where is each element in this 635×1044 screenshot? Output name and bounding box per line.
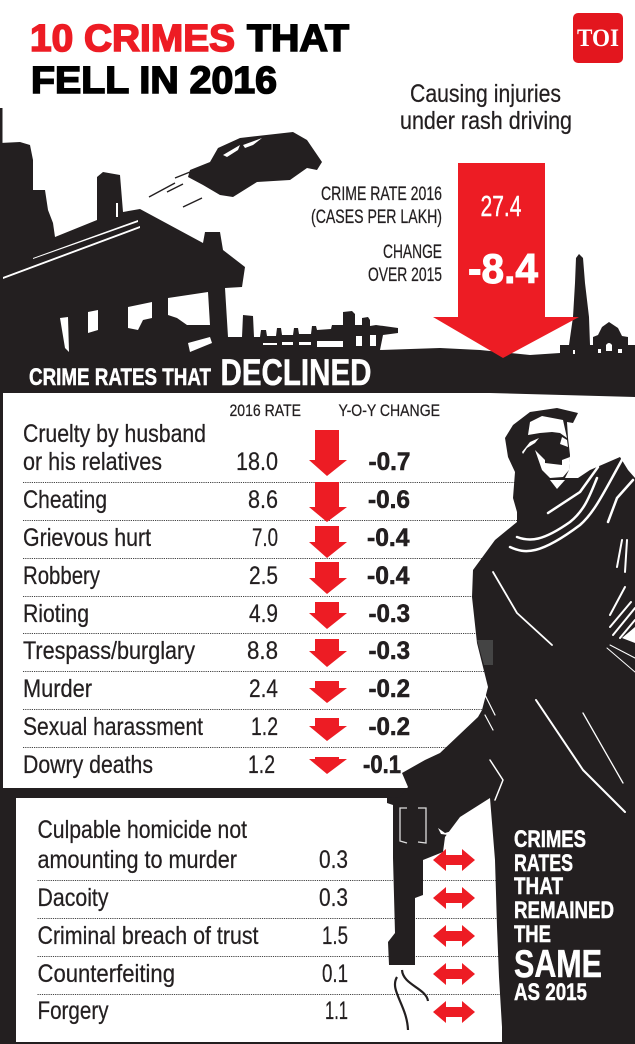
callout heading: causing injuries <box>400 80 572 135</box>
house windows and roof highlights <box>3 203 622 354</box>
black lower background <box>0 392 635 1044</box>
row: robbery: Robbery <box>23 562 100 590</box>
side label: crimes rates that remained the same as 2015: THE <box>514 921 551 948</box>
row: dowry deaths: 1.2 <box>248 751 275 779</box>
row: grievous hurt <box>23 524 410 558</box>
row: sexual harassment: Sexual harassment <box>23 713 203 741</box>
icon: TOI logo: TOI <box>577 25 619 52</box>
row: forgery: 1.1 <box>325 997 348 1025</box>
side label: crimes rates that remained the same as 2015: AS 2015 <box>514 979 587 1006</box>
cloth folds <box>438 458 635 835</box>
callout labels: crime rate and change: CRIME RATE 2016 <box>321 184 442 205</box>
row: sexual harassment: -0.2 <box>368 713 410 741</box>
row: cruelty: -0.7 <box>368 448 410 476</box>
row: murder: -0.2 <box>368 675 410 703</box>
row: murder <box>23 675 410 703</box>
row: forgery: Forgery <box>38 997 109 1025</box>
icon: TOI logo <box>573 13 623 63</box>
row: robbery: -0.4 <box>367 562 410 590</box>
row: sexual harassment <box>23 713 410 741</box>
illustration: man with gun <box>387 408 635 1044</box>
panel: crime rates that remained the same <box>16 798 502 1042</box>
row: cruelty: Cruelty by husband <box>23 420 206 448</box>
row: dowry deaths: Dowry deaths <box>23 751 153 779</box>
row: sexual harassment: 1.2 <box>251 713 278 741</box>
banner heading: crime rates that declined: DECLINED <box>220 352 372 393</box>
face highlights <box>522 416 570 489</box>
same-rate double arrows <box>433 849 475 1023</box>
row: trespass: -0.3 <box>368 637 410 665</box>
illustration: skyline silhouette <box>0 108 635 396</box>
title: THAT <box>247 18 349 60</box>
row: robbery: 2.5 <box>249 562 278 590</box>
panel: crime rates that declined <box>3 393 635 788</box>
callout labels: crime rate and change: OVER 2015 <box>368 265 442 286</box>
row: criminal breach of trust: Criminal breach of trust <box>38 922 259 950</box>
side label: crimes rates that remained the same as 2015: RATES <box>514 850 573 877</box>
row: rioting <box>23 600 410 629</box>
table header <box>230 401 440 420</box>
row: cruelty: 18.0 <box>236 448 278 476</box>
row: grievous hurt: 7.0 <box>252 524 278 552</box>
callout labels: crime rate and change <box>311 184 442 286</box>
row: counterfeiting <box>38 960 348 988</box>
mouth shadow <box>551 460 560 463</box>
gun smoke <box>395 970 428 1030</box>
row: rioting: -0.3 <box>368 600 410 628</box>
row: rioting: 4.9 <box>249 600 278 628</box>
row: forgery <box>38 997 348 1025</box>
row: murder: Murder <box>23 675 92 703</box>
title: FELL IN 2016 <box>31 60 277 102</box>
row: dacoity: Dacoity <box>38 884 109 912</box>
big red down arrow: -8.4 <box>468 245 539 292</box>
side label: crimes rates that remained the same as 2015: SAME <box>514 943 602 986</box>
row: trespass: 8.8 <box>247 637 278 665</box>
side label: crimes rates that remained the same as 2015: CRIMES <box>514 826 586 853</box>
banner heading: crime rates that declined: CRIME RATES THAT <box>29 364 211 391</box>
row: cheating: Cheating <box>23 486 107 514</box>
row: trespass <box>23 637 410 667</box>
row: counterfeiting: Counterfeiting <box>38 960 175 988</box>
title <box>30 18 349 102</box>
row: dowry deaths <box>23 751 401 779</box>
callout labels: crime rate and change: (CASES PER LAKH) <box>311 207 442 228</box>
row: culpable homicide: Culpable homicide not <box>38 816 247 844</box>
big red down arrow <box>433 163 579 358</box>
side label: crimes rates that remained the same as 2015: THAT <box>514 873 563 900</box>
callout heading: causing injuries: Causing injuries <box>410 80 561 108</box>
banner heading: crime rates that declined <box>29 352 372 393</box>
row: counterfeiting: 0.1 <box>322 960 348 988</box>
row: culpable homicide <box>38 816 348 874</box>
row: grievous hurt: -0.4 <box>367 524 410 552</box>
row: cheating: 8.6 <box>248 486 278 514</box>
row: dacoity <box>38 884 348 912</box>
row: culpable homicide: amounting to murder <box>38 846 237 874</box>
row: murder: 2.4 <box>249 675 278 703</box>
callout labels: crime rate and change: CHANGE <box>383 242 442 263</box>
row: criminal breach of trust: 1.5 <box>322 922 348 950</box>
table header: Y-O-Y CHANGE <box>338 401 440 420</box>
icon: flying car <box>149 132 322 207</box>
side label: crimes rates that remained the same as 2015 <box>514 826 614 1006</box>
row: grievous hurt: Grievous hurt <box>23 524 151 552</box>
row: robbery <box>23 562 410 594</box>
title: 10 CRIMES <box>30 18 235 60</box>
big red down arrow: 27.4 <box>480 191 522 223</box>
row: dacoity: 0.3 <box>319 884 348 912</box>
row: rioting: Rioting <box>23 600 89 628</box>
row: dowry deaths: -0.1 <box>363 751 401 779</box>
gun sight marks <box>400 808 426 843</box>
row: cheating: -0.6 <box>368 486 410 514</box>
row: culpable homicide: 0.3 <box>319 846 348 874</box>
callout heading: causing injuries: under rash driving <box>400 107 572 135</box>
row: cruelty: or his relatives <box>23 448 162 476</box>
table header: 2016 RATE <box>230 401 301 420</box>
row: trespass: Trespass/burglary <box>23 637 195 665</box>
row: cheating <box>23 482 410 522</box>
row: cruelty <box>23 420 410 476</box>
